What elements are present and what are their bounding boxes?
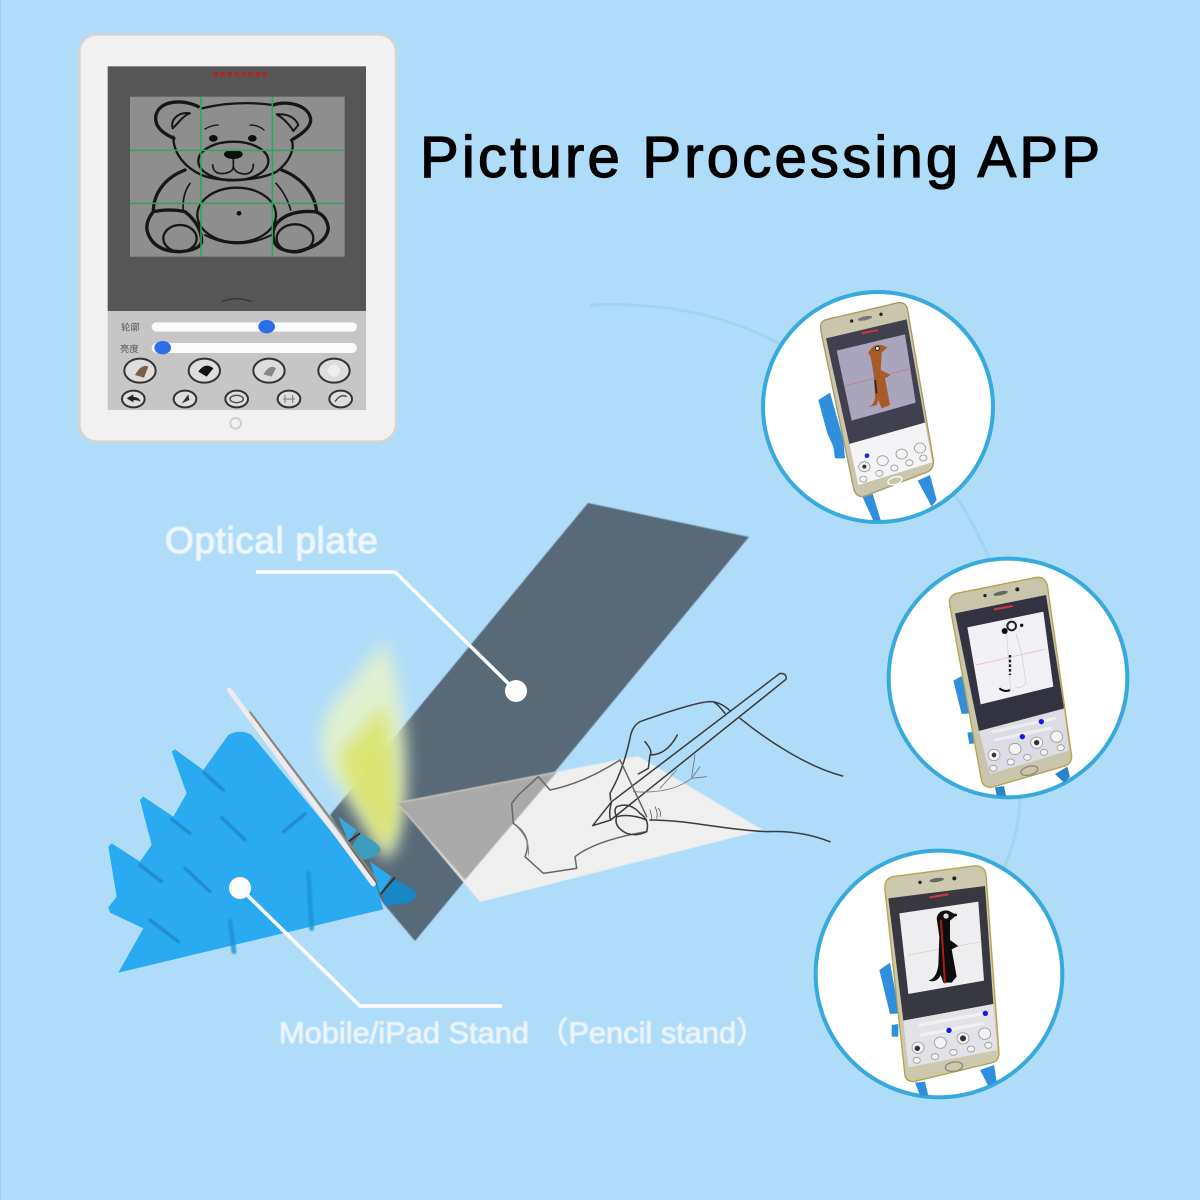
tablet with bear sketch xyxy=(79,34,396,442)
mobile and tablet stand xyxy=(108,690,416,973)
optical plate xyxy=(330,503,749,941)
connecting arc between phone circles xyxy=(590,304,1020,868)
hand holding pencil xyxy=(512,673,843,873)
sliders: 亮度 xyxy=(120,343,139,354)
phone body xyxy=(885,866,999,1082)
drawing paper xyxy=(397,756,763,902)
tablet edge xyxy=(229,690,378,884)
phone body xyxy=(821,303,933,497)
phone circle: black silhouette photo xyxy=(816,851,1062,1097)
label: optical plate: Optical plate xyxy=(165,520,378,561)
phone circle: colour photo xyxy=(763,292,993,522)
phone circle: outline photo xyxy=(889,559,1127,797)
stand tabs xyxy=(338,817,416,906)
meerkat sparse sketch xyxy=(1007,633,1026,690)
meerkat colour xyxy=(867,345,891,408)
stand slots xyxy=(140,773,312,952)
bear drawing xyxy=(147,102,328,252)
home button xyxy=(230,418,241,429)
pencil xyxy=(593,673,786,826)
stand behind phone xyxy=(879,963,997,1096)
meerkat black silhouette xyxy=(928,910,958,983)
sliders xyxy=(120,320,357,354)
label: mobile stand: Mobile/iPad Stand （Pencil stand） xyxy=(279,1017,767,1050)
green grid lines xyxy=(130,97,345,257)
stand behind phone xyxy=(818,393,937,521)
stand behind phone xyxy=(953,676,1070,796)
title: Picture Processing APP xyxy=(420,125,1100,190)
app buttons xyxy=(122,359,352,407)
phone body xyxy=(949,577,1072,787)
hand outline xyxy=(512,702,843,873)
light projection glow xyxy=(320,640,406,860)
stand leader line xyxy=(229,877,502,1006)
sliders: 轮廓 xyxy=(121,321,140,332)
stand body xyxy=(108,732,383,973)
optical plate leader line xyxy=(256,572,527,702)
